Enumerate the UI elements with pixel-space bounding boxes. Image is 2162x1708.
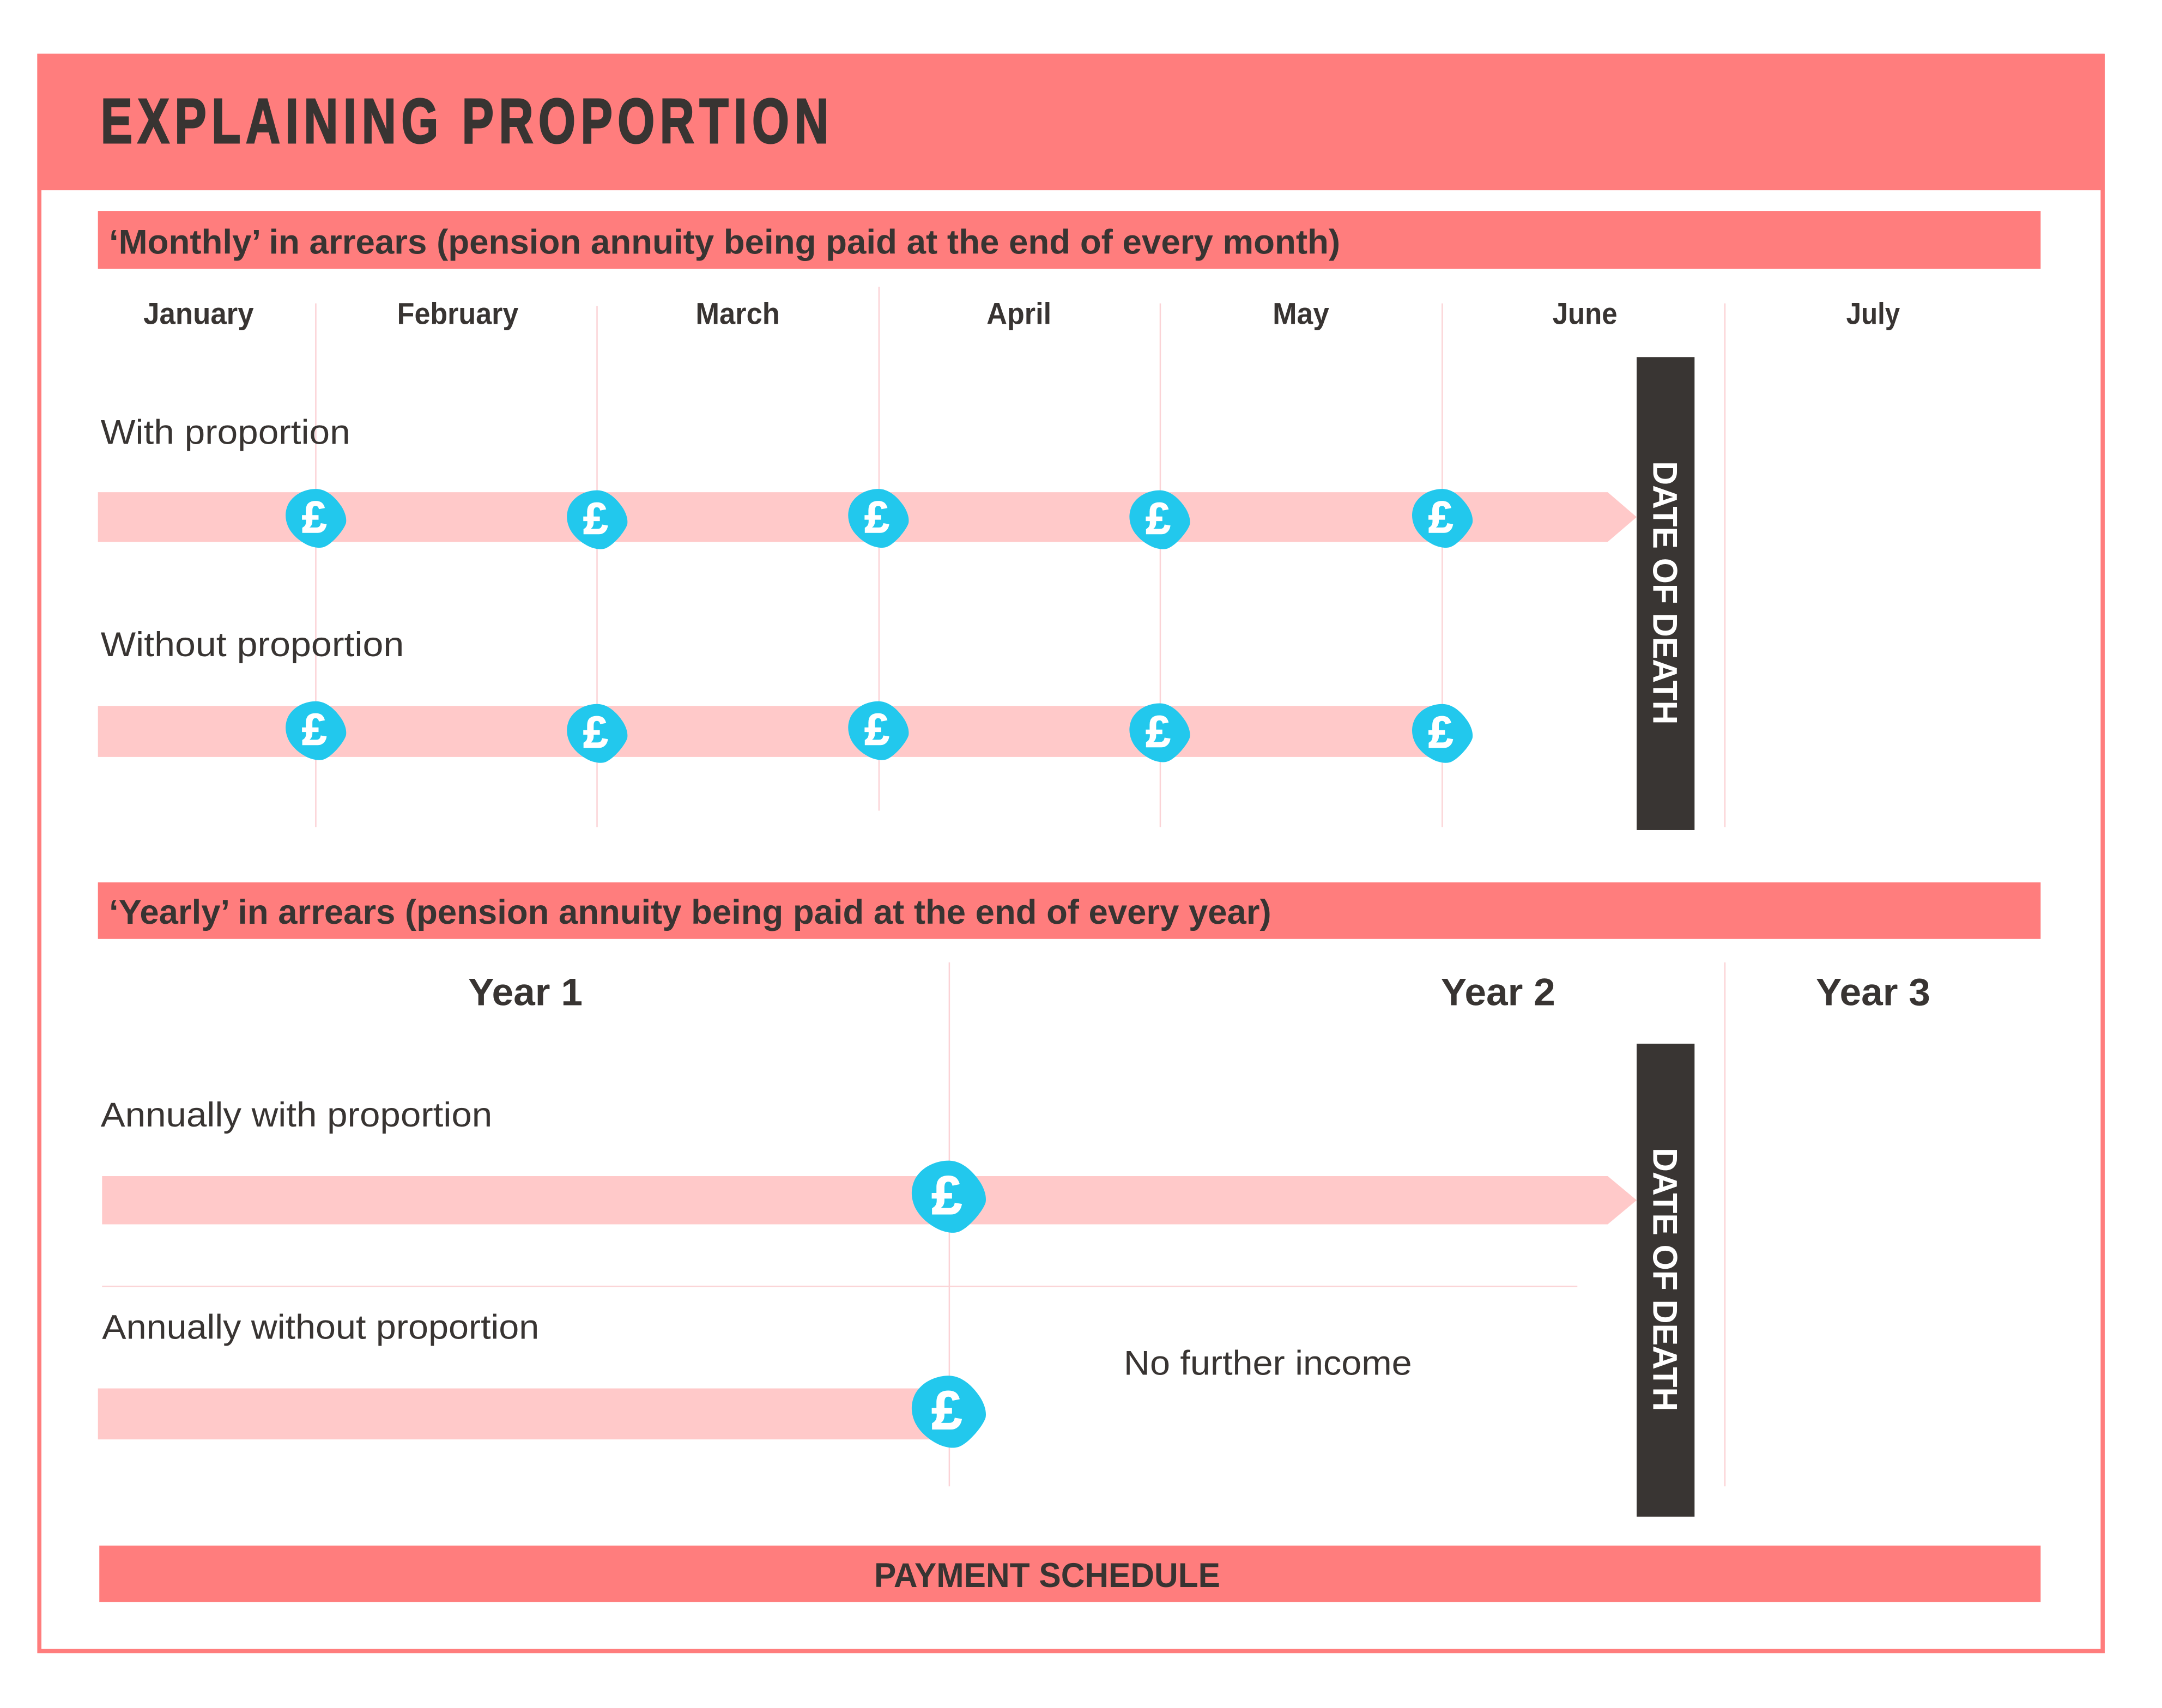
year labels: Year 2	[1441, 971, 1555, 1014]
coin: without proportion 4: £	[1146, 707, 1171, 756]
coin: with proportion 4	[1129, 490, 1190, 549]
coin: without proportion 5: £	[1428, 708, 1453, 758]
date of death marker: monthly: DATE OF DEATH	[1645, 461, 1683, 724]
month labels: July	[1846, 297, 1900, 331]
footer band: payment schedule: PAYMENT SCHEDULE	[874, 1556, 1220, 1595]
coin: with proportion 2	[567, 490, 627, 549]
label: annually with proportion: Annually with proportion	[101, 1096, 492, 1134]
coin: with proportion 3	[848, 489, 909, 548]
month labels: March	[695, 297, 780, 331]
bar: without proportion	[98, 706, 1442, 757]
panel: yearly in arrears	[98, 882, 2040, 1517]
coin: with proportion 1	[286, 489, 346, 548]
coin: annually without proportion	[912, 1376, 986, 1448]
label: no further income: No further income	[1124, 1344, 1412, 1382]
panel: monthly in arrears	[98, 211, 2040, 830]
coin: annually without proportion: £	[932, 1380, 962, 1441]
year grid lines	[102, 962, 1725, 1486]
coin: with proportion 2: £	[583, 494, 608, 543]
coin: with proportion 5: £	[1428, 493, 1453, 542]
coin: without proportion 4	[1129, 703, 1190, 762]
coin: without proportion 5	[1412, 704, 1473, 763]
coin: with proportion 5	[1412, 489, 1473, 548]
year labels: Year 1	[468, 971, 583, 1014]
month labels: June	[1553, 297, 1618, 331]
coin: with proportion 1: £	[302, 493, 326, 542]
year labels	[468, 971, 1930, 1014]
coin: without proportion 3	[848, 701, 909, 760]
header band	[37, 54, 2104, 190]
year labels: Year 3	[1816, 971, 1930, 1014]
coin: without proportion 2: £	[583, 708, 608, 758]
yearly heading: ‘Yearly’ in arrears (pension annuity being paid at the end of every year)	[109, 893, 1271, 931]
month labels: April	[986, 297, 1051, 331]
month labels: May	[1273, 297, 1329, 331]
coin: with proportion 3: £	[864, 493, 889, 542]
month labels: February	[397, 297, 518, 331]
monthly heading	[98, 211, 2040, 269]
coin: without proportion 3: £	[864, 705, 889, 755]
month labels	[143, 297, 1900, 331]
coin: annually with proportion: £	[932, 1165, 962, 1226]
coin: annually with proportion	[912, 1161, 986, 1233]
label: with proportion: With proportion	[101, 414, 350, 452]
label: without proportion: Without proportion	[101, 626, 404, 664]
arrow bar: annually with proportion	[102, 1176, 1637, 1225]
title: EXPLAINING PROPORTION	[101, 86, 829, 156]
footer band: payment schedule	[99, 1546, 2040, 1602]
date of death marker: yearly	[1637, 1044, 1694, 1517]
coin: without proportion 1: £	[302, 705, 326, 755]
month labels: January	[143, 297, 254, 331]
date of death marker: yearly: DATE OF DEATH	[1645, 1148, 1683, 1411]
coin: with proportion 4: £	[1146, 494, 1171, 543]
arrow bar: with proportion	[98, 492, 1637, 542]
monthly heading: ‘Monthly’ in arrears (pension annuity being paid at the end of every month)	[109, 223, 1340, 261]
label: annually without proportion: Annually without proportion	[102, 1309, 539, 1347]
date of death marker: monthly	[1637, 357, 1694, 830]
bar: annually without proportion	[98, 1389, 949, 1439]
coin: without proportion 2	[567, 704, 627, 763]
month grid lines	[316, 287, 1725, 827]
coin: without proportion 1	[286, 701, 346, 760]
yearly heading	[98, 882, 2040, 939]
